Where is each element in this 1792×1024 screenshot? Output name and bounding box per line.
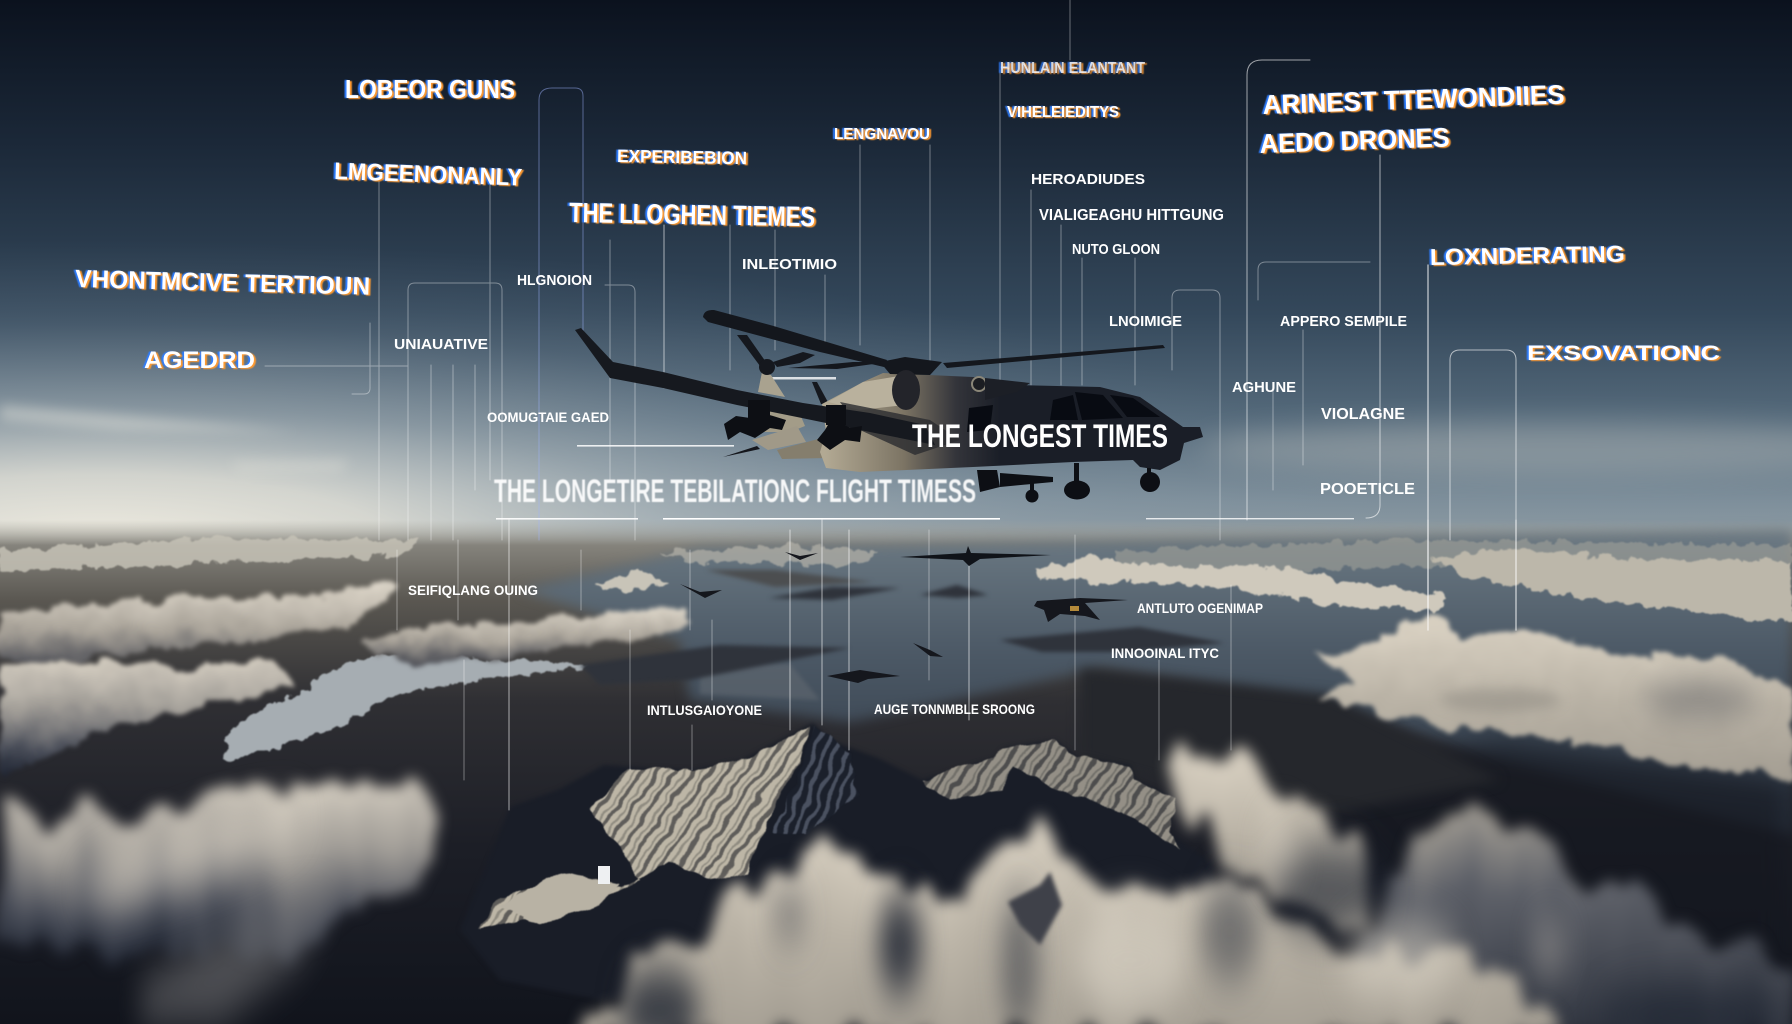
foreground cloud left [0, 780, 442, 960]
label: lnoimige: LNOIMIGE [1109, 313, 1182, 330]
label: hlgnoion: HLGNOION [517, 272, 592, 289]
heading: flight times: THE LONGETIRE TEBILATIONC FLIGHT TIMESS [494, 473, 976, 509]
fuselage [820, 373, 1203, 472]
label: innooinal ityc: INNOOINAL ITYC [1111, 645, 1219, 661]
label: vialigeaghu hittgung: VIALIGEAGHU HITTGUNG [1039, 207, 1224, 224]
horizontal rules [496, 377, 1354, 520]
dark islands [580, 570, 1224, 685]
label: auge tonnmble sroong: AUGE TONNMBLE SROONG [874, 701, 1035, 717]
mountain right ridges [922, 740, 1180, 850]
foreground cloud far right [1340, 812, 1792, 1024]
cloud shadows [620, 845, 1780, 1024]
label: exsovationc: EXSOVATIONC [1527, 342, 1720, 365]
icon: small drones [680, 552, 943, 683]
label: lmgeenonanly: LMGEENONANLY [334, 158, 523, 192]
label: oomugtaie gaed: OOMUGTAIE GAED [487, 409, 609, 425]
small peak in cloud [1008, 872, 1062, 945]
label: loxnderating: LOXNDERATING [1430, 241, 1625, 270]
label: antluto ogenimap: ANTLUTO OGENIMAP [1137, 600, 1263, 616]
label: agedrd: AGEDRD [144, 347, 255, 374]
label: intlusgaioyone: INTLUSGAIOYONE [647, 702, 762, 718]
cockpit windows [967, 392, 1160, 432]
label: arinest ttewondiies: ARINEST TTEWONDIIES [1262, 79, 1565, 120]
tail boom wing [575, 328, 935, 445]
label: inleotimio: INLEOTIMIO [742, 256, 837, 273]
heading: the longest times: THE LONGEST TIMES [912, 418, 1168, 454]
label: lobeor guns: LOBEOR GUNS [345, 74, 515, 104]
label: nuto gloon: NUTO GLOON [1072, 241, 1160, 258]
foreground cloud centre [590, 832, 1560, 1024]
label: hunlain elantant: HUNLAIN ELANTANT [1000, 60, 1145, 77]
tail rotor [737, 335, 829, 404]
label: lengnavou: LENGNAVOU [834, 126, 930, 143]
wing shadow on fuselage [840, 402, 960, 455]
label: the lloghen tiemes: THE LLOGHEN TIEMES [569, 197, 815, 232]
far clouds [0, 538, 1792, 622]
label: uniauative: UNIAUATIVE [394, 336, 488, 353]
label: appero sempile: APPERO SEMPILE [1280, 313, 1407, 330]
icon: quadcopter drone [1034, 598, 1128, 622]
engine nacelles [723, 398, 826, 459]
cloud highlights [70, 793, 1568, 1015]
mid-left clouds [0, 583, 402, 667]
icon: fixed wing drone [900, 546, 1051, 566]
weapons [724, 400, 862, 450]
cloud: right large [1315, 620, 1792, 780]
label: aedo drones: AEDO DRONES [1259, 122, 1450, 159]
helicopter [575, 310, 1203, 502]
landing gear [977, 463, 1160, 502]
label: vhontmcive tertioun: VHONTMCIVE TERTIOUN [75, 265, 370, 301]
ground and water [0, 520, 1792, 1024]
label: pooeticle: POOETICLE [1320, 481, 1415, 498]
cloud: left bank [0, 658, 296, 780]
mountain lower streak [500, 872, 620, 925]
mountain snow face [771, 725, 858, 833]
label: seifiqlang ouing: SEIFIQLANG OUING [408, 582, 538, 598]
tail fin [758, 372, 785, 397]
label: experibebion: EXPERIBEBION [617, 146, 747, 168]
label: viheleieditys: VIHELEIEDITYS [1007, 104, 1119, 121]
main rotor [703, 310, 1165, 375]
mountain lit face [480, 725, 810, 930]
mountain range [460, 723, 1220, 1000]
label: aghune: AGHUNE [1232, 379, 1296, 396]
foreground cloud lower left [140, 900, 330, 1024]
label: heroadiudes: HEROADIUDES [1031, 171, 1145, 188]
connector lines [265, 0, 1516, 810]
foreground cloud right column [1165, 750, 1365, 930]
silver lake [226, 652, 591, 762]
engine exhaust [892, 370, 1030, 410]
cloud: centre bank [362, 608, 692, 663]
upper left labels [75, 74, 930, 374]
small labels [394, 171, 1415, 718]
upper right labels [1000, 60, 1720, 365]
label: violagne: VIOLAGNE [1321, 406, 1405, 423]
engine housing highlight [828, 375, 905, 410]
